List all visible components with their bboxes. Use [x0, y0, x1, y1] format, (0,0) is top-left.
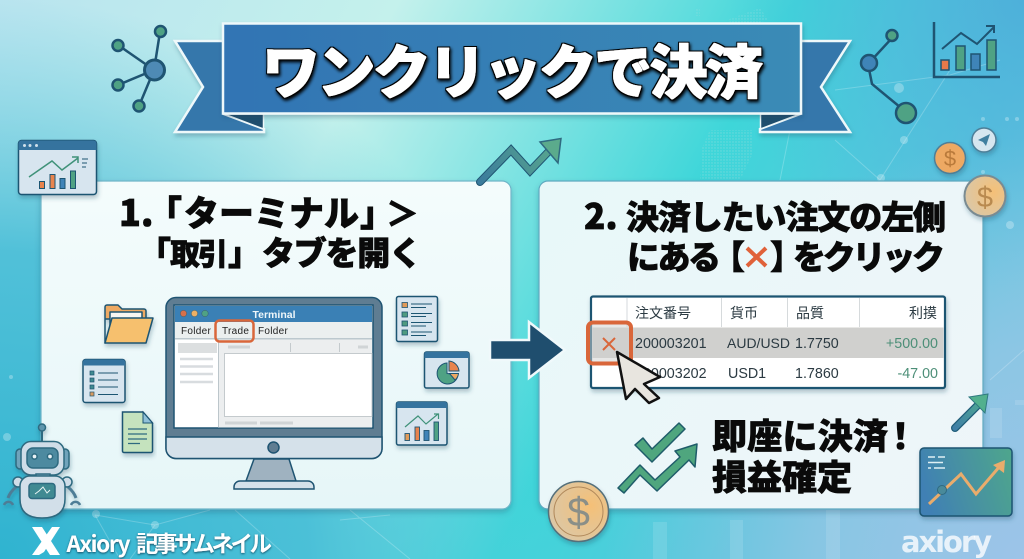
panel: step 1 card — [41, 181, 511, 509]
heading: step 1: 「 — [138, 227, 171, 275]
icon: check and rising arrow — [618, 423, 697, 493]
heading: step 2: 【 — [712, 231, 745, 279]
table row 2: USD1 — [728, 366, 766, 382]
table row 2: -47.00 — [897, 366, 938, 382]
icon: list window left — [83, 360, 125, 402]
monitor illustration: Terminal — [253, 309, 296, 321]
icon: dollar coin bottom: $ — [567, 489, 590, 535]
monitor illustration: Folder — [181, 326, 212, 337]
monitor stand — [234, 459, 314, 489]
text: result message: ！ — [883, 409, 918, 460]
icon: small upward arrow — [955, 394, 988, 428]
text: footer label: 記事サムネイル — [136, 527, 272, 559]
icon: chart window top left — [18, 140, 96, 194]
monitor illustration: Trade — [222, 326, 249, 337]
icon: coins top right: $ — [977, 182, 993, 214]
banner: ribbon body — [223, 24, 801, 114]
heading: step 1: タブを開く — [262, 227, 422, 275]
panel: step 2 card — [539, 181, 983, 509]
table row 2: 200003202 — [635, 366, 707, 382]
heading: step 1: ターミナル — [184, 186, 359, 237]
heading: step 1: ＞ — [386, 188, 419, 236]
logo: Axiory mark — [32, 527, 60, 555]
logo: axiory wordmark: axiory — [901, 525, 992, 559]
heading: step 1 — [119, 185, 422, 275]
icon: chart card — [920, 448, 1012, 516]
heading: step 2: 決済したい注文の左側 — [626, 191, 946, 239]
arrow: zigzag upward behind panels — [480, 138, 561, 182]
icon: network top left — [112, 26, 166, 112]
heading: step 1: 「 — [147, 186, 182, 237]
heading: step 2: 】 — [770, 231, 803, 279]
text: footer label — [66, 527, 272, 559]
icon: document — [122, 412, 152, 452]
text: result message — [712, 409, 918, 501]
table header — [635, 305, 937, 321]
table row 1: +500.00 — [886, 336, 938, 352]
icon: chart window right — [396, 402, 447, 445]
text: footer label: Axiory — [66, 527, 131, 559]
icon: list doc right — [396, 296, 438, 342]
text: result message: 損益確定 — [712, 450, 852, 501]
heading: step 1: 1. — [119, 185, 154, 237]
heading: step 1: 」 — [228, 227, 261, 275]
icon: coins top right — [934, 128, 1006, 216]
monitor body — [166, 298, 382, 458]
heading: step 2: をクリック — [793, 231, 945, 279]
icon: coins top right: $ — [944, 146, 956, 171]
heading: step 2: 2. — [584, 189, 618, 240]
monitor illustration: Folder — [258, 326, 289, 337]
table row 1: 200003201 — [635, 336, 707, 352]
icon: pie chart window — [424, 352, 469, 388]
heading: step 2 — [584, 189, 946, 279]
monitor illustration — [166, 298, 382, 489]
banner: ribbon tails — [175, 41, 850, 132]
table row 1 — [635, 335, 938, 352]
highlight: close button — [588, 322, 631, 364]
table header: 品質 — [796, 305, 824, 321]
table row 2 — [635, 366, 938, 382]
icon: bar chart top right — [934, 22, 1000, 77]
table header: 注文番号 — [635, 305, 691, 321]
table row 2: 1.7860 — [795, 366, 839, 382]
table header: 利摸 — [909, 305, 937, 321]
heading: step 1: 」 — [360, 186, 395, 237]
table header: 貨币 — [730, 305, 758, 321]
heading: step 1: 取引 — [170, 230, 228, 274]
icon: mouse cursor — [617, 352, 660, 403]
arrow: step 1 to step 2 — [490, 322, 565, 378]
monitor screen — [174, 305, 373, 428]
icon: dollar coin bottom — [548, 482, 608, 542]
heading: step 2: にある — [627, 231, 721, 279]
text: result message: 即座に決済 — [712, 409, 888, 460]
icon: folder — [105, 305, 153, 343]
icon: robot — [4, 424, 80, 518]
table row 1: AUD/USD — [727, 335, 790, 351]
table: order list — [591, 296, 945, 388]
table row 1: 1.7750 — [795, 336, 839, 352]
highlight: Trade tab — [216, 320, 254, 342]
icon: network top right — [861, 30, 916, 123]
title: ワンクリックで決済 — [262, 26, 763, 110]
